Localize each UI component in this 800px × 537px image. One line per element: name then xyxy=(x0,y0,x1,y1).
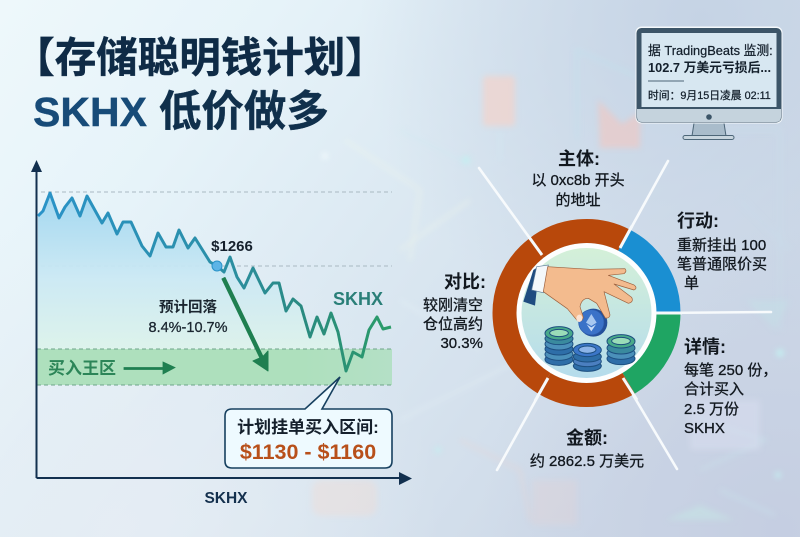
label: comparison: 仓位高约 xyxy=(423,316,483,333)
area under price line xyxy=(38,193,342,349)
centre disc xyxy=(522,248,652,378)
title line 1: 【存储聪明钱计划】 xyxy=(13,34,387,81)
label: action: 单 xyxy=(684,275,699,292)
callout xyxy=(225,377,392,468)
label: subject: 主体: xyxy=(558,149,600,169)
monitor screen xyxy=(642,33,776,107)
axes xyxy=(31,160,412,485)
label: action: 笔普通限价买 xyxy=(677,256,767,273)
label: amount: 约 2862.5 万美元 xyxy=(530,453,644,470)
label: amount xyxy=(530,427,644,470)
icon: thumbnail xyxy=(576,315,582,322)
monitor text: 据 TradingBeats 监测: xyxy=(648,43,773,58)
icon: sleeve xyxy=(523,266,539,306)
drop label: 8.4%-10.7% xyxy=(148,320,228,336)
buy zone arrow xyxy=(124,362,175,374)
icon: right coin stack xyxy=(607,335,635,365)
segment gaps xyxy=(529,226,682,401)
monitor body xyxy=(636,26,782,124)
title xyxy=(13,34,387,136)
icon: hand and coins xyxy=(523,265,636,371)
icon: cuff xyxy=(532,265,548,293)
label: details: 每笔 250 份， xyxy=(684,362,777,379)
price marker xyxy=(212,261,222,271)
price label: $1266 xyxy=(211,238,253,255)
series label: SKHX xyxy=(333,289,383,309)
monitor text: 102.7 万美元亏损后... xyxy=(648,60,771,75)
icon: left coin stack xyxy=(545,327,573,365)
drop label: 预计回落 xyxy=(159,299,217,316)
icon: centre coin stack xyxy=(573,343,601,371)
drop label xyxy=(148,299,228,336)
label: action: 重新挂出 100 xyxy=(677,237,766,254)
icon: held coin xyxy=(579,309,607,337)
label: details: 2.5 万份 xyxy=(684,401,739,418)
x axis label: SKHX xyxy=(204,490,248,507)
label: comparison: 30.3% xyxy=(440,335,483,352)
label: details: 详情: xyxy=(684,337,726,357)
ring base xyxy=(516,243,656,383)
monitor text: 时间：9月15日凌晨 02:11 xyxy=(648,88,771,102)
icon: hand xyxy=(543,267,636,321)
line chart panel xyxy=(31,160,412,507)
label: amount: 金额: xyxy=(566,427,608,448)
label: comparison: 较刚清空 xyxy=(423,296,483,314)
label: details: SKHX xyxy=(684,420,725,437)
callout: 计划挂单买入区间: xyxy=(237,418,379,437)
label: action xyxy=(677,211,767,292)
drop arrow xyxy=(222,278,268,371)
label: subject: 以 0xc8b 开头 xyxy=(531,172,625,189)
spokes outer xyxy=(479,161,771,470)
buy zone band xyxy=(37,349,392,385)
monitor power dot xyxy=(706,114,712,120)
segment: details xyxy=(629,313,668,383)
donut diagram xyxy=(479,161,771,470)
monitor xyxy=(636,26,782,140)
label: subject: 的地址 xyxy=(555,192,601,209)
segment: amount xyxy=(544,383,629,395)
monitor stand xyxy=(692,123,726,136)
callout: $1130 - $1160 xyxy=(240,440,376,464)
buy zone label: 买入王区 xyxy=(48,359,116,378)
label: details: 合计买入 xyxy=(684,381,744,398)
title line 2: SKHX 低价做多 xyxy=(33,89,329,136)
label: subject xyxy=(531,149,625,209)
chart gridlines xyxy=(41,192,392,266)
label: details xyxy=(684,337,777,437)
segment: comparison xyxy=(505,248,544,383)
segment: action xyxy=(624,240,668,313)
label: action: 行动: xyxy=(677,211,719,231)
price line xyxy=(38,193,391,371)
label: comparison xyxy=(423,272,486,352)
segment: subject xyxy=(536,231,624,248)
label: comparison: 对比: xyxy=(444,272,486,292)
background xyxy=(274,0,800,537)
monitor text xyxy=(648,43,773,102)
